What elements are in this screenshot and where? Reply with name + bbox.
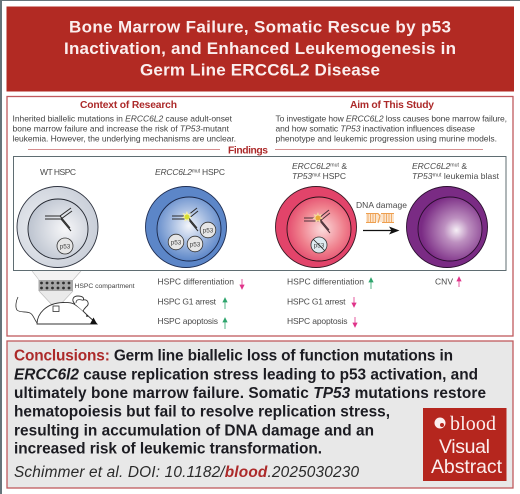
cell: WT HSPC: p53 [60, 244, 71, 250]
heading: context of research: Context of Research [80, 100, 177, 111]
arrow: DNA damage transition: DNA damage [356, 200, 407, 210]
citation: Schimmer et al. DOI: 10.1182/blood.2025030230 [14, 464, 359, 481]
labels: ERCC6L2 mutant readouts [158, 276, 244, 329]
text block: aim: and how somatic TP53 inactivation influences disease [276, 124, 475, 134]
heading: aim of this study: Aim of This Study [350, 100, 434, 111]
text block: aim [276, 114, 507, 144]
arrow: DNA damage transition [356, 200, 407, 234]
title banner: Germ Line ERCC6L2 Disease [140, 60, 380, 80]
cell: ERCC6L2 and TP53 mutant HSPC: ERCC6L2 [292, 161, 331, 171]
panel: research context, aim and findings [7, 96, 513, 336]
text block: aim: phenotype and leukemic progression using murine models. [276, 134, 497, 144]
cell: leukemia blast [406, 161, 500, 268]
labels: ERCC6L2 mutant readouts: HSPC G1 arrest [158, 296, 217, 306]
text block: conclusions: ERCC6l2 cause replication stress leading to p53 activation, and [14, 366, 478, 384]
cell: ERCC6L2 mutant HSPC: p53 [190, 242, 201, 248]
cell: ERCC6L2 mutant HSPC: ERCC6L2 [155, 167, 192, 177]
text block: conclusions: increased risk of leukemic transformation. [14, 440, 322, 458]
cell: ERCC6L2 and TP53 mutant HSPC: mut [312, 172, 321, 178]
icon: DNA break star [182, 211, 192, 222]
title banner: Inactivation, and Enhanced Leukemogenesis in [64, 39, 456, 58]
cell: ERCC6L2 mutant HSPC: HSPC [200, 167, 225, 177]
logo: blood visual abstract: Visual [439, 436, 490, 458]
cell: ERCC6L2 mutant HSPC: p53 [203, 228, 214, 234]
findings box [14, 156, 506, 270]
cell: leukemia blast: leukemia blast [441, 171, 500, 181]
text block: context: bone marrow failure and increase the risk of TP53-mutant [12, 124, 230, 134]
cell: leukemia blast: mut [433, 172, 442, 178]
labels: double mutant readouts: HSPC apoptosis [287, 316, 348, 326]
cell: WT HSPC: WT HSPC [40, 167, 76, 177]
icon: mouse with HSPC compartment [16, 271, 135, 324]
labels: double mutant readouts: HSPC differentiation [287, 276, 364, 286]
cell: ERCC6L2 and TP53 mutant HSPC: & [339, 161, 347, 171]
cell: leukemia blast: & [459, 161, 467, 171]
text block: context: leukemia. However, the underlying mechanisms are unclear. [12, 134, 236, 144]
icon: damaged DNA strand [366, 214, 394, 223]
cell: ERCC6L2 mutant HSPC [146, 167, 226, 268]
cell: ERCC6L2 mutant HSPC: mut [192, 168, 201, 174]
text block: conclusions: hematopoiesis but fail to resolve replication stress, [14, 404, 390, 420]
cell: leukemia blast: TP53 [412, 171, 433, 181]
cell: ERCC6L2 and TP53 mutant HSPC: TP53 [292, 171, 312, 181]
labels: ERCC6L2 mutant readouts: HSPC apoptosis [158, 316, 218, 326]
labels: double mutant readouts: HSPC G1 arrest [287, 296, 346, 306]
text block: conclusions: ultimately bone marrow failure. Somatic TP53 mutations restore [14, 385, 486, 402]
cell: ERCC6L2 and TP53 mutant HSPC [276, 161, 356, 268]
cell: ERCC6L2 mutant HSPC: p53 [171, 240, 182, 246]
text block: conclusions [14, 348, 486, 458]
text block: context: Inherited biallelic mutations in ERCC6L2 cause adult-onset [12, 114, 233, 124]
label: CNV readout: CNV [435, 276, 453, 286]
cell: leukemia blast: ERCC6L2 [412, 161, 451, 171]
text block: conclusions: resulting in accumulation of DNA damage and an [14, 422, 374, 440]
heading: findings: Findings [228, 146, 268, 156]
logo: blood visual abstract [423, 408, 506, 481]
panel: conclusions [7, 341, 513, 488]
text block: context [12, 114, 236, 144]
cell: ERCC6L2 and TP53 mutant HSPC: HSPC [320, 171, 346, 181]
icon: mouse with HSPC compartment: HSPC compartment [74, 283, 135, 290]
cell: leukemia blast: mut [450, 162, 460, 168]
icon: DNA break star [312, 212, 323, 222]
logo: blood visual abstract: blood [450, 413, 496, 435]
cell: WT HSPC [17, 167, 98, 268]
title banner: Bone Marrow Failure, Somatic Rescue by p53 [69, 18, 451, 36]
text block: conclusions: Conclusions: Germ line biallelic loss of function mutations in [14, 348, 453, 364]
labels: double mutant readouts [287, 276, 373, 327]
text block: aim: To investigate how ERCC6L2 loss causes bone marrow failure, [276, 114, 507, 124]
cell: ERCC6L2 and TP53 mutant HSPC: mut [330, 162, 340, 168]
title banner [6, 6, 514, 92]
logo: blood visual abstract: Abstract [431, 456, 503, 478]
labels: ERCC6L2 mutant readouts: HSPC differentiation [158, 276, 234, 286]
icon: inactivated p53: p53 [314, 242, 325, 250]
label: CNV readout [435, 276, 461, 287]
